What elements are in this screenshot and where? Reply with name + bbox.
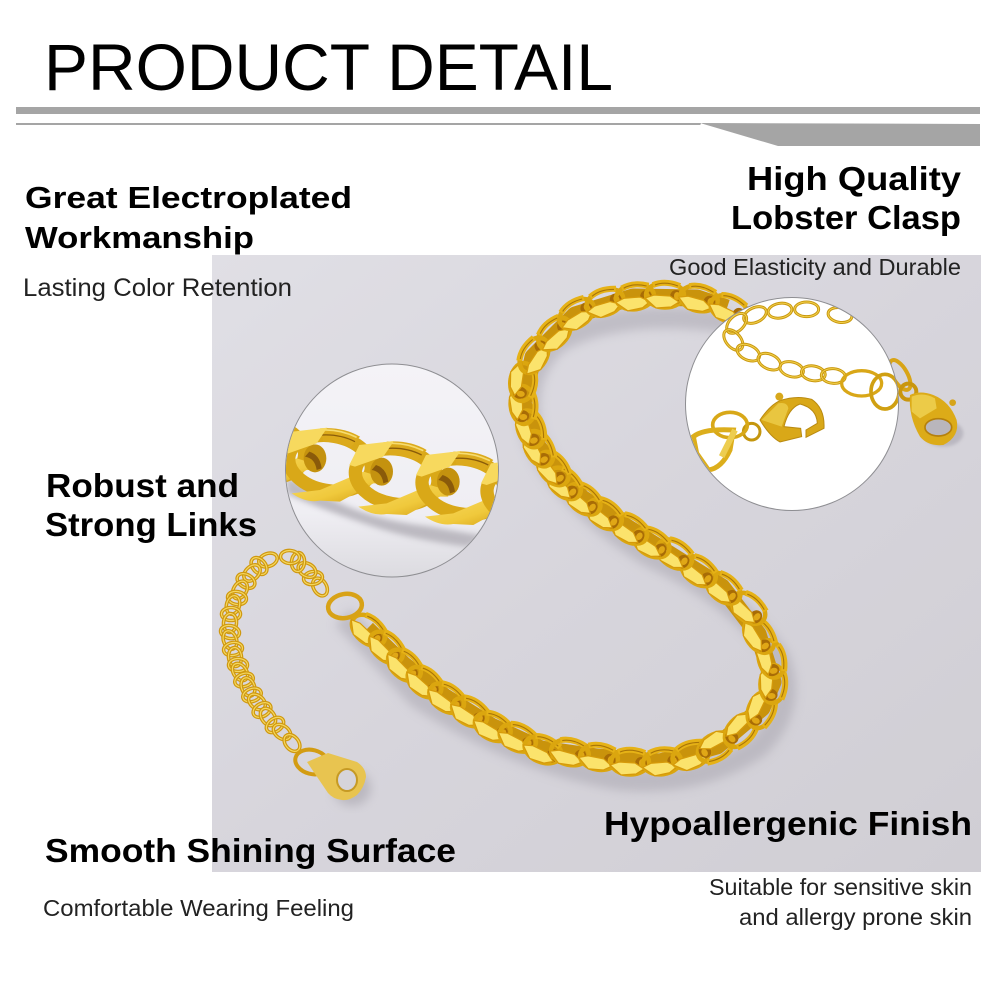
callout: smooth surface: Smooth Shining Surface — [45, 832, 456, 869]
callout: lobster clasp: Lobster Clasp — [731, 199, 961, 236]
callout: hypoallergenic finish: Suitable for sensitive skin — [709, 874, 972, 900]
main curb chain — [345, 282, 789, 777]
photo background — [212, 255, 981, 872]
header divider bars — [16, 107, 980, 146]
panel: link detail magnifier — [285, 364, 499, 578]
callout: hypoallergenic finish: Hypoallergenic Finish — [604, 805, 972, 842]
callout: robust links — [45, 467, 257, 543]
end tab — [292, 746, 371, 806]
jump ring at chain start — [326, 591, 364, 621]
callout: electroplated workmanship: Great Electroplated — [25, 180, 352, 215]
bracelet — [220, 282, 963, 806]
callout: electroplated workmanship — [23, 180, 352, 302]
title: PRODUCT DETAIL — [44, 30, 613, 104]
callout: smooth surface: Comfortable Wearing Feeling — [43, 895, 354, 921]
callout: electroplated workmanship: Workmanship — [25, 220, 254, 255]
callout: robust links: Robust and — [46, 467, 239, 504]
magnifier background — [686, 298, 898, 510]
enlarged chain links — [286, 427, 498, 548]
extension chain — [220, 550, 330, 754]
callout: robust links: Strong Links — [45, 506, 257, 543]
callout: lobster clasp: Good Elasticity and Durable — [669, 254, 961, 280]
enlarged clasp and extension chain — [693, 301, 899, 470]
callout: lobster clasp: High Quality — [747, 160, 962, 197]
callout: hypoallergenic finish: and allergy prone skin — [739, 904, 972, 930]
callout: electroplated workmanship: Lasting Color Retention — [23, 274, 292, 302]
callout: lobster clasp — [669, 160, 962, 280]
chain shadow — [343, 318, 785, 780]
lobster clasp — [885, 357, 963, 447]
callout: smooth surface — [43, 832, 456, 921]
callout: hypoallergenic finish — [604, 805, 972, 930]
panel: clasp detail magnifier — [686, 298, 899, 510]
magnifier background — [286, 364, 498, 577]
